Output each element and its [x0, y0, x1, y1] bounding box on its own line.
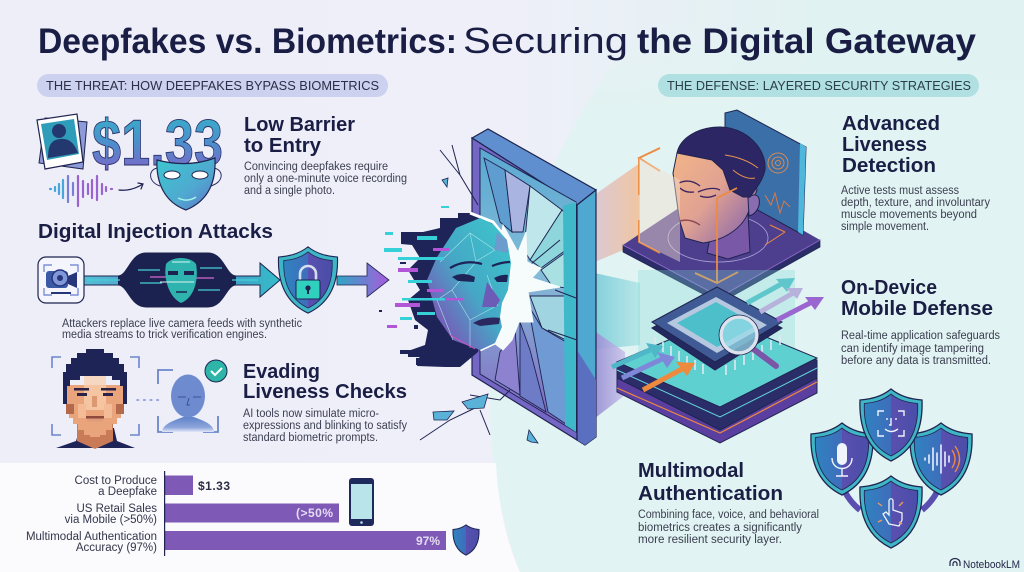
icon: lock shield — [278, 247, 389, 313]
bar: retail sales — [65, 503, 339, 526]
icon: waveform — [50, 176, 143, 206]
text block: low barrier to entry: and a single photo. — [244, 185, 335, 197]
bar: cost to produce — [75, 475, 230, 498]
magnifier — [719, 315, 776, 366]
section pill: the defense: THE DEFENSE: LAYERED SECURITY STRATEGIES — [667, 78, 971, 93]
text block: on-device mobile defense — [841, 277, 1000, 367]
heading: digital injection attacks: Digital Injection Attacks — [38, 221, 273, 243]
icon: camera — [38, 257, 84, 303]
text block: multimodal authentication: biometrics creates a significantly — [638, 522, 802, 534]
icon: small shield — [453, 525, 479, 555]
title — [38, 20, 976, 61]
frame side — [577, 190, 596, 445]
text block: multimodal authentication: more resilient security layer. — [638, 534, 782, 546]
text block: advanced liveness detection: Active tests must assess — [841, 185, 959, 197]
sensor panel with fingerprint — [725, 110, 806, 235]
text block: advanced liveness detection: Advanced — [842, 113, 940, 135]
bar: multimodal accuracy: Multimodal Authentication — [26, 531, 157, 543]
title: Deepfakes vs. Biometrics: — [38, 21, 457, 61]
dissolving hair — [401, 213, 507, 367]
flying shards — [433, 178, 538, 443]
section pill: the defense — [658, 74, 979, 97]
bar: cost to produce: Cost to Produce — [75, 475, 157, 487]
text block: advanced liveness detection: Liveness — [842, 134, 927, 156]
text block: injection description: media streams to trick verification engines. — [62, 329, 267, 341]
bar: retail sales: (>50% — [296, 506, 333, 520]
text block: on-device mobile defense: before any data is transmitted. — [841, 355, 991, 367]
text block: advanced liveness detection: Detection — [842, 155, 936, 177]
cracks — [420, 145, 577, 440]
bar: cost to produce: $1.33 — [198, 479, 230, 493]
text block: on-device mobile defense: Real-time application safeguards — [841, 330, 1000, 342]
bar: retail sales: US Retail Sales — [76, 503, 157, 515]
text block: evading liveness checks: AI tools now simulate micro- — [243, 408, 379, 420]
text block: advanced liveness detection: muscle movements beyond — [841, 209, 977, 221]
head — [673, 127, 765, 259]
text block: on-device mobile defense: Mobile Defense — [841, 298, 993, 320]
icon: photo stack — [37, 114, 87, 169]
glass shards — [484, 158, 566, 424]
impact hole — [490, 225, 560, 350]
icon: synthetic avatar with check — [158, 360, 227, 432]
panel: statistics chart — [0, 463, 520, 572]
dotted connector — [137, 399, 160, 401]
glitch deepfake face — [379, 206, 511, 367]
bar: multimodal accuracy: Accuracy (97%) — [76, 542, 157, 554]
text block: injection description — [62, 318, 302, 341]
bar: multimodal accuracy: 97% — [416, 534, 440, 548]
eyes and brows — [452, 274, 475, 282]
text block: low barrier to entry: only a one-minute voice recording — [244, 173, 407, 185]
frame top edge — [472, 129, 596, 205]
bar: cost to produce: a Deepfake — [98, 486, 157, 498]
background: defense side — [490, 0, 1024, 572]
icon: pixelated face — [52, 349, 139, 449]
text block: on-device mobile defense: On-Device — [841, 277, 937, 299]
text block: multimodal authentication: Combining face, voice, and behavioral — [638, 509, 819, 521]
translucent column — [638, 270, 795, 373]
text block: advanced liveness detection: simple movement. — [841, 221, 929, 233]
light beams from frame to defense — [590, 163, 640, 422]
icon: mask — [151, 158, 221, 210]
glass — [480, 148, 576, 432]
text block: advanced liveness detection — [841, 113, 990, 233]
text block: multimodal authentication: Authentication — [638, 483, 783, 505]
text block: low barrier to entry: Low Barrier — [244, 114, 355, 136]
platform: liveness detection — [623, 110, 820, 303]
section pill: the threat: THE THREAT: HOW DEEPFAKES BYPASS BIOMETRICS — [46, 78, 379, 93]
orange scan cube — [639, 148, 738, 283]
text block: advanced liveness detection: depth, texture, and involuntary — [841, 197, 990, 209]
frame front — [472, 138, 577, 440]
text block: evading liveness checks — [243, 361, 407, 444]
incoming arrows — [612, 350, 682, 390]
shield: audio wave — [910, 423, 972, 495]
diagram: injection pipeline — [84, 253, 280, 307]
lower platform: on-device — [612, 278, 824, 443]
section pill: the threat — [37, 74, 388, 97]
title: Securing — [463, 20, 628, 61]
text block: injection description: Attackers replace live camera feeds with synthetic — [62, 318, 302, 330]
big number: $1.33: $1.33 — [92, 106, 223, 179]
shield cluster: multimodal — [811, 389, 972, 548]
text block: evading liveness checks: expressions and blinking to satisfy — [243, 420, 407, 432]
text block: multimodal authentication: Multimodal — [638, 460, 744, 482]
shield: face scan — [860, 389, 922, 461]
bar: retail sales: via Mobile (>50%) — [65, 514, 157, 526]
text block: low barrier to entry: Convincing deepfakes require — [244, 161, 388, 173]
face white halo — [470, 213, 511, 350]
glitch bars — [379, 206, 463, 365]
text block: evading liveness checks: Evading — [243, 361, 320, 383]
title: the Digital Gateway — [637, 21, 976, 61]
shield: voice — [811, 423, 873, 495]
text block: evading liveness checks: standard biometric prompts. — [243, 432, 378, 444]
text block: low barrier to entry: to Entry — [244, 135, 322, 157]
text block: evading liveness checks: Liveness Checks — [243, 381, 407, 403]
face facets — [427, 218, 511, 350]
upward arrows — [747, 282, 812, 320]
text block: multimodal authentication — [638, 460, 819, 546]
chip — [652, 287, 782, 375]
shattered frame — [420, 129, 596, 445]
icon: phone — [349, 478, 374, 526]
bar: multimodal accuracy — [26, 531, 446, 554]
text block: low barrier to entry — [244, 114, 407, 197]
text block: on-device mobile defense: can identify image tampering — [841, 343, 984, 355]
shield: touch gesture — [860, 476, 922, 548]
brand mark: NotebookLM: NotebookLM — [963, 559, 1020, 571]
